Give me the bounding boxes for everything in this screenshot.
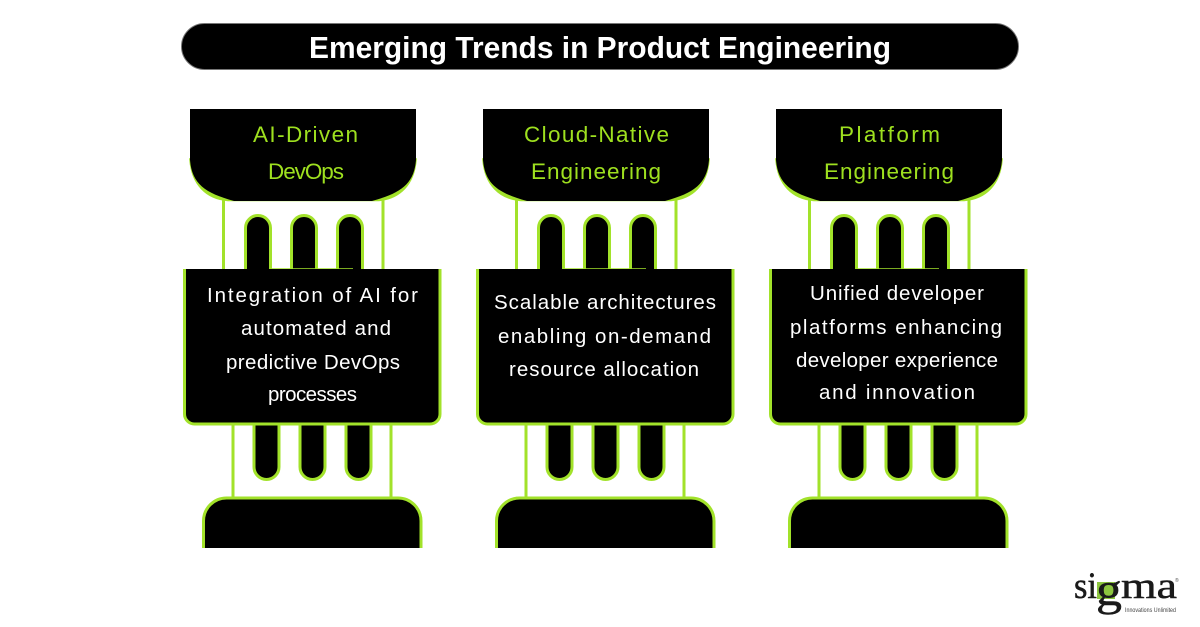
text block: Cloud-Native Engineering description: resource allocation <box>509 358 699 381</box>
text block: AI-Driven DevOps description: processes <box>268 383 357 406</box>
connector frame: AI-Driven DevOps <box>184 109 440 548</box>
heading: Platform Engineering: Platform <box>839 122 940 147</box>
logo: sigma <box>1074 564 1179 615</box>
logo: sigma: ® <box>1175 577 1179 584</box>
heading: Cloud-Native Engineering: Cloud-Native <box>524 122 669 147</box>
connector frame: Cloud-Native Engineering <box>478 109 733 548</box>
text block: Cloud-Native Engineering description: Scalable architectures <box>494 291 716 314</box>
text block: Platform Engineering description: platforms enhancing <box>790 316 1002 339</box>
heading: AI-Driven DevOps: DevOps <box>268 159 344 184</box>
heading: Cloud-Native Engineering: Engineering <box>531 159 661 184</box>
text block: Platform Engineering description: and innovation <box>819 381 975 404</box>
text block: AI-Driven DevOps description: Integration of AI for <box>207 284 418 307</box>
text block: AI-Driven DevOps description: automated and <box>241 317 391 340</box>
panel: AI-Driven DevOps <box>184 109 440 548</box>
title banner <box>182 24 1018 70</box>
text block: Platform Engineering description: Unified developer <box>810 282 984 305</box>
text block: Platform Engineering description: developer experience <box>796 349 998 372</box>
heading: Platform Engineering <box>824 122 954 184</box>
logo: sigma: si <box>1074 566 1097 607</box>
heading: AI-Driven DevOps <box>253 122 358 184</box>
logo: sigma: ma <box>1121 566 1177 607</box>
connector frame: Platform Engineering <box>770 109 1026 548</box>
text block: Cloud-Native Engineering description <box>494 291 716 381</box>
heading: Cloud-Native Engineering <box>524 122 669 184</box>
panel: Cloud-Native Engineering <box>478 109 733 548</box>
title banner: Emerging Trends in Product Engineering <box>309 31 891 65</box>
text block: AI-Driven DevOps description <box>207 284 418 406</box>
panel: Platform Engineering <box>770 109 1026 548</box>
text block: Cloud-Native Engineering description: enabling on-demand <box>498 325 711 348</box>
heading: AI-Driven DevOps: AI-Driven <box>253 122 358 147</box>
logo: sigma: Innovations Unlimited <box>1125 608 1176 614</box>
text block: AI-Driven DevOps description: predictive DevOps <box>226 351 400 374</box>
logo: sigma: g <box>1096 564 1122 615</box>
text block: Platform Engineering description <box>790 282 1002 404</box>
heading: Platform Engineering: Engineering <box>824 159 954 184</box>
